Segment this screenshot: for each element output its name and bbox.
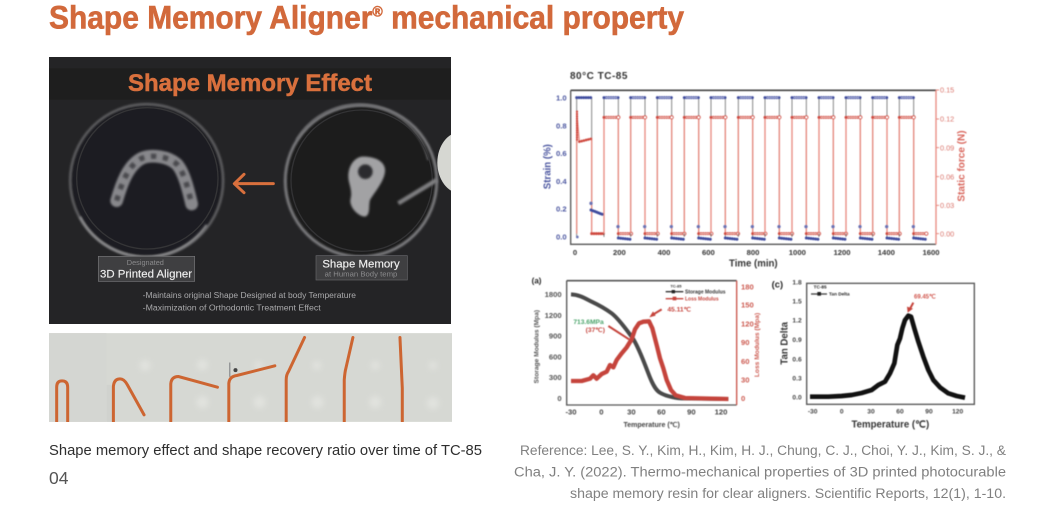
right axis: static force: Static force (N): [957, 130, 968, 202]
chart: storage and loss modulus: [531, 276, 761, 430]
x axis: time: 1200: [833, 248, 851, 257]
right axis: 180: [741, 282, 754, 291]
right petri dish with deformed aligner: [282, 102, 451, 256]
left petri dish with aligner: [70, 104, 223, 257]
right axis: static force: 0.03: [940, 201, 954, 210]
annotation: 713.6 MPa at 37 degrees: [573, 319, 629, 339]
left axis: 900: [549, 332, 562, 341]
repeating load cycles: [604, 98, 928, 239]
reference citation: shape memory resin for clear aligners. Scientific Reports, 12(1), 1-10.: [570, 486, 1006, 502]
title: [49, 0, 684, 36]
panel: shape recovery sequence strip: [49, 333, 452, 422]
left axis: 600: [549, 352, 562, 361]
reference citation: Cha, J. Y. (2022). Thermo-mechanical properties of 3D printed photocurable: [514, 464, 1006, 480]
panel: shape memory effect photo: [49, 57, 451, 324]
y axis: 1.5: [792, 298, 802, 305]
right axis: static force: 0.06: [940, 172, 954, 181]
legend: [811, 285, 850, 297]
x axis: time: 1400: [878, 248, 895, 257]
x axis: -30: [808, 409, 818, 416]
chart: strain and static force over time: [542, 71, 968, 270]
left axis: 1800: [545, 290, 562, 299]
x axis: time: [573, 248, 940, 269]
right axis: 60: [741, 357, 750, 366]
label: shape memory at human body temp: at Human Body temp: [325, 272, 397, 279]
annotation: 69.45 degrees peak: [907, 294, 936, 313]
right axis: Loss Modulus (Mpa): [754, 313, 761, 377]
x axis: time: 800: [747, 248, 759, 257]
page number: 04: [49, 468, 68, 488]
x axis: 90: [687, 408, 696, 417]
right axis: static force: 0.15: [940, 86, 954, 95]
legend: TC-85: [814, 285, 827, 290]
left axis: strain: 0.6: [556, 149, 567, 158]
y axis: 1.8: [792, 279, 802, 286]
loss modulus curve: [571, 321, 728, 399]
annotation: 69.45 degrees peak: 69.45℃: [914, 294, 936, 301]
y axis: 1.2: [792, 318, 802, 325]
right axis: 150: [741, 301, 754, 310]
x axis: -30: [565, 408, 577, 417]
storage modulus curve: [571, 294, 728, 399]
left axis: strain: [543, 93, 567, 242]
bullet notes: -Maintains original Shape Designed at body Temperature: [143, 291, 357, 300]
panel tag: (c): [772, 279, 783, 289]
right axis: static force: 0.00: [940, 229, 954, 238]
left axis: strain: Strain (%): [543, 144, 554, 189]
x axis: time: 400: [658, 248, 670, 257]
y axis: Tan Delta: [780, 321, 791, 365]
plot frame: [571, 90, 936, 244]
x axis: time: 200: [613, 248, 626, 257]
x axis: [808, 409, 964, 430]
label: shape memory at human body temp: Shape Memory: [322, 259, 400, 271]
title: Shape Memory Aligner: [49, 0, 395, 36]
y axis: 0.3: [792, 376, 802, 383]
x axis: time: 0: [573, 248, 577, 257]
panel tag: (a): [532, 276, 542, 285]
x axis: 0: [840, 409, 844, 416]
x axis: 60: [896, 409, 904, 416]
right axis: static force: [936, 86, 968, 238]
x axis: 120: [952, 409, 964, 416]
label: designated 3D printed aligner: [98, 256, 195, 281]
left axis: strain: 0.2: [556, 205, 567, 214]
legend: [666, 283, 726, 303]
left axis: strain: 0.0: [556, 233, 567, 242]
left axis: 300: [549, 373, 562, 382]
tan delta curve: [810, 316, 965, 398]
bullet notes: [143, 291, 357, 313]
label: designated 3D printed aligner: Designated: [127, 258, 164, 267]
title: ®: [372, 4, 383, 20]
annotation: 713.6 MPa at 37 degrees: (37℃): [586, 326, 605, 334]
arrow: [234, 174, 273, 193]
reference citation: [514, 443, 1007, 502]
y axis: [780, 279, 802, 402]
annotation: 713.6 MPa at 37 degrees: 713.6MPa: [573, 319, 604, 326]
right axis: 120: [741, 319, 754, 328]
annotation: 45.11 degrees peak: [649, 306, 692, 317]
x axis: 30: [867, 409, 875, 416]
x axis: time: 1000: [789, 248, 806, 257]
x axis: 30: [627, 408, 636, 417]
left axis: strain: 1.0: [556, 93, 567, 102]
chart: tan delta: [771, 279, 976, 430]
legend: TC-85: [670, 283, 682, 288]
first cycle data: [576, 98, 604, 238]
x axis: time: 1600: [922, 248, 940, 257]
chart title: 80°C TC-85: [570, 71, 628, 82]
angle marker: [230, 362, 237, 377]
x axis: [565, 408, 727, 429]
left axis: Storage Modulus (Mpa): [533, 310, 540, 383]
legend: Tan Delta: [829, 292, 850, 297]
recovery curves: [57, 337, 402, 422]
plot frame: [567, 281, 737, 405]
x axis: time: 600: [702, 248, 715, 257]
right axis: [741, 282, 761, 403]
x axis: Temperature (℃): [623, 421, 680, 429]
right axis: static force: 0.12: [940, 115, 954, 124]
x axis: 0: [599, 408, 603, 417]
caption: Shape memory effect and shape recovery ratio over time of TC-85: [49, 443, 482, 459]
y axis: 0.9: [792, 337, 802, 344]
bullet notes: -Maximization of Orthodontic Treatment Effect: [143, 304, 322, 313]
y axis: 0.0: [792, 395, 802, 402]
header band: Shape Memory Effect: [128, 71, 372, 97]
left axis: 1200: [545, 311, 562, 320]
x axis: 120: [715, 408, 727, 417]
label: shape memory at human body temp: [316, 256, 407, 280]
x axis: 60: [657, 408, 666, 417]
plot frame: [807, 283, 974, 404]
legend: Storage Modulus: [685, 290, 726, 296]
x axis: time: Time (min): [729, 258, 778, 269]
left axis: strain: 0.4: [556, 177, 567, 186]
left axis: 0: [557, 394, 562, 403]
x axis: 90: [925, 409, 933, 416]
right axis: static force: 0.09: [940, 143, 954, 152]
label: designated 3D printed aligner: 3D Printed Aligner: [100, 268, 192, 280]
header band: [49, 68, 451, 100]
y axis: 0.6: [792, 356, 802, 363]
right axis: 90: [741, 338, 750, 347]
right axis: 30: [741, 376, 750, 385]
right axis: 0: [741, 394, 745, 403]
annotation: 45.11 degrees peak: 45.11℃: [667, 306, 692, 314]
reference citation: Reference: Lee, S. Y., Kim, H., Kim, H. J., Chung, C. J., Choi, Y. J., Kim, S. J., &: [520, 443, 1007, 459]
left axis: [533, 290, 562, 403]
legend: Loss Modulus: [685, 297, 719, 303]
left axis: strain: 0.8: [556, 121, 567, 130]
